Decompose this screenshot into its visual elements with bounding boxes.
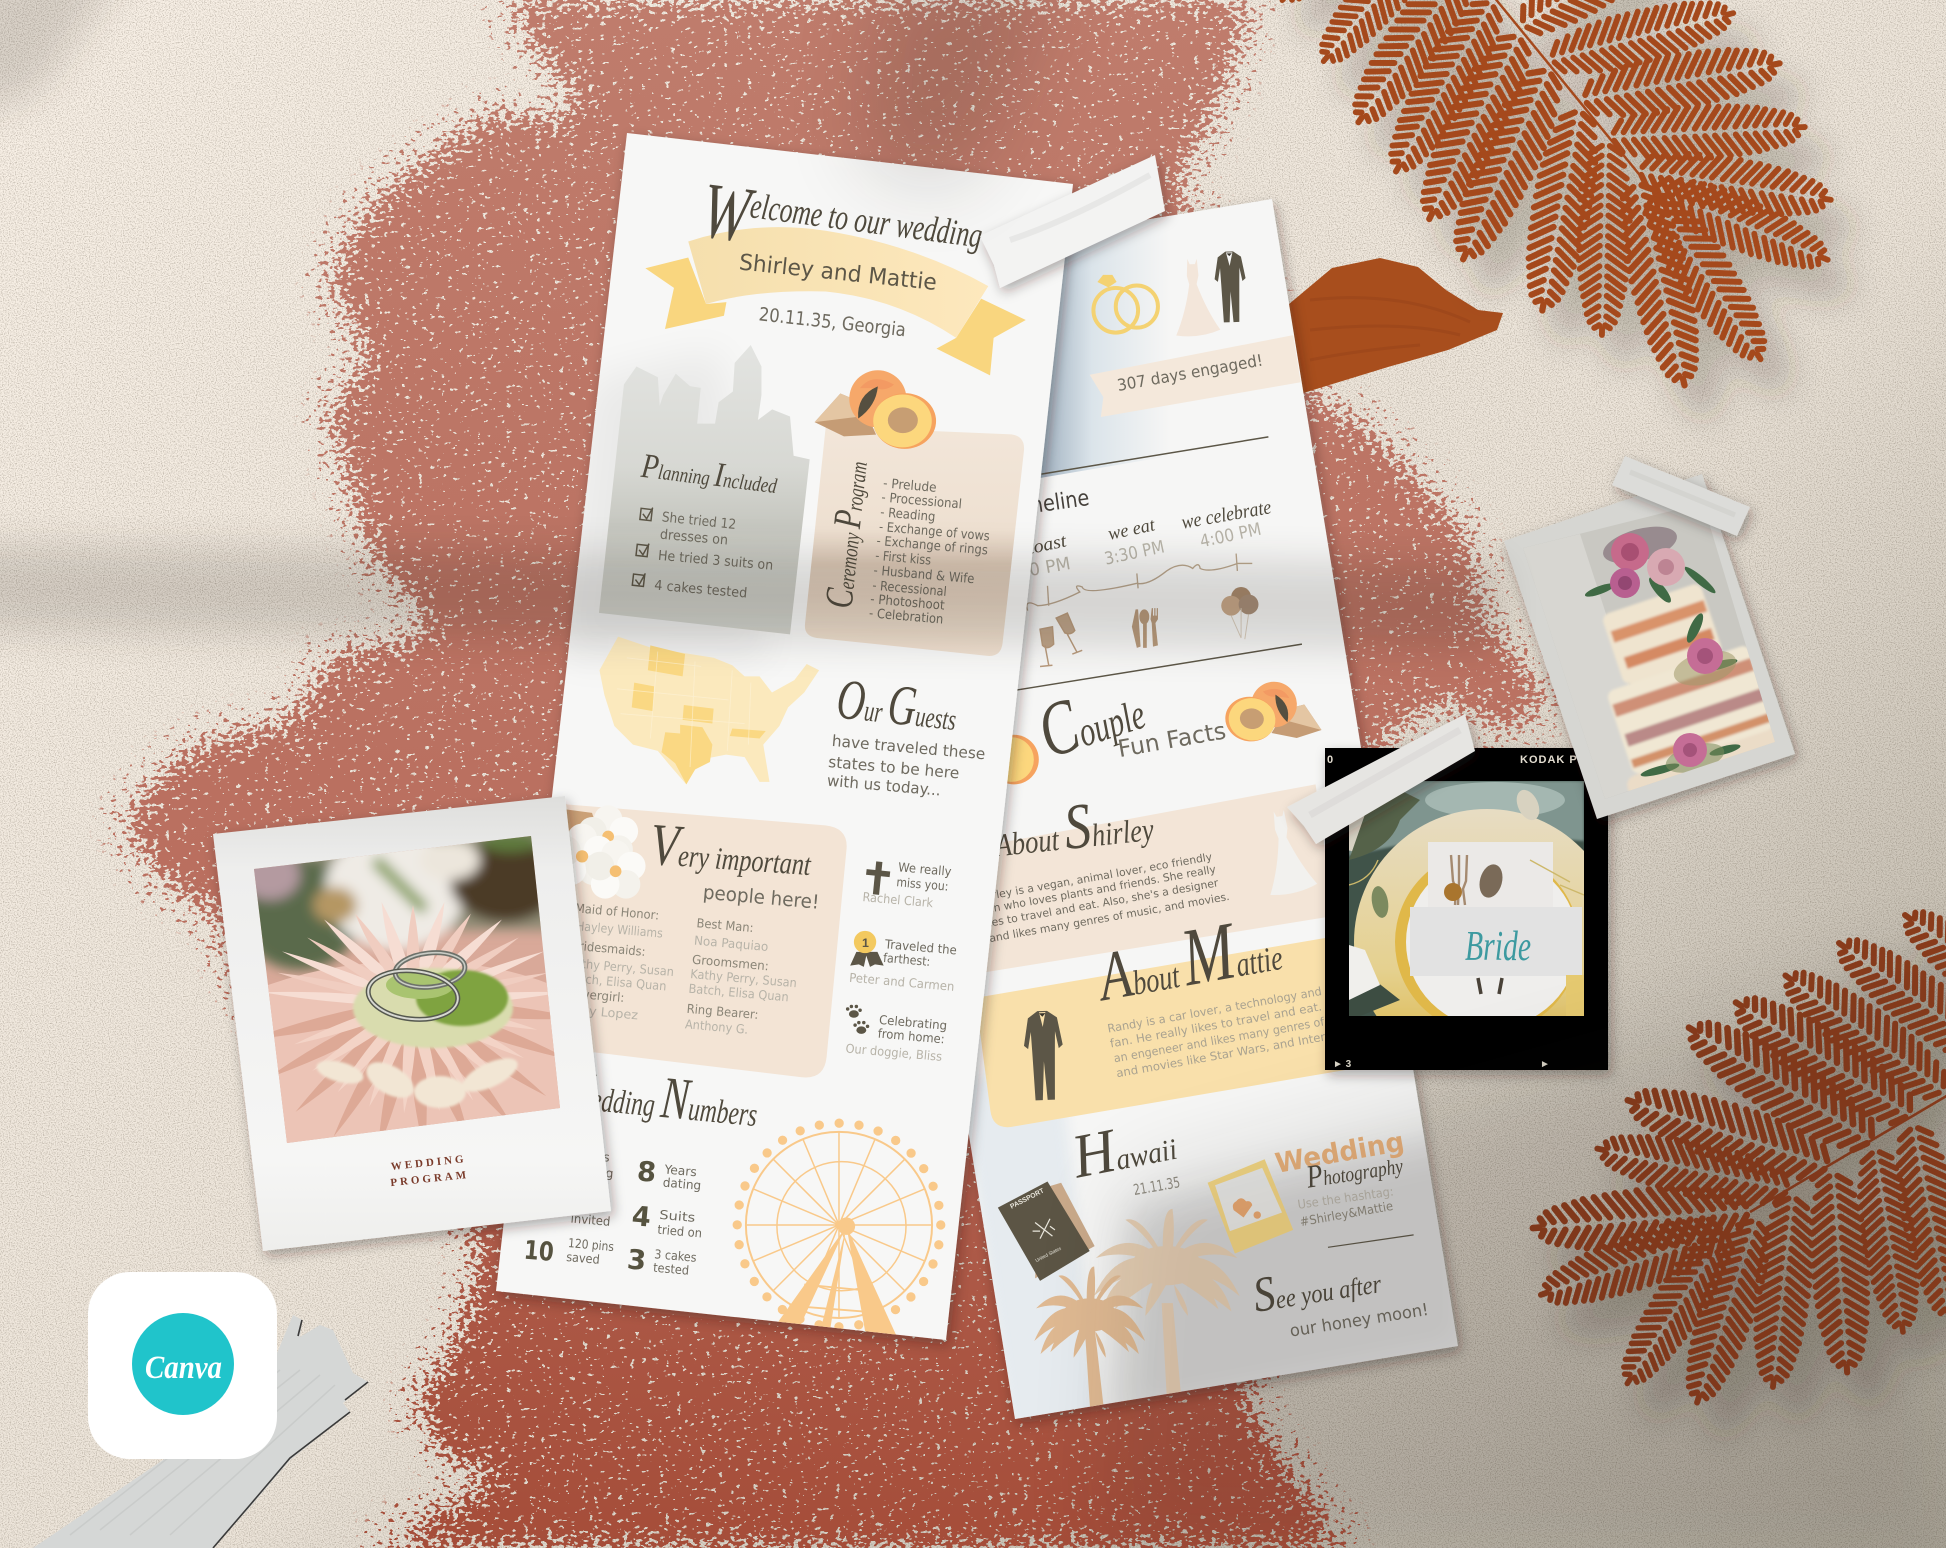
photo card: film frame with place setting: 0 xyxy=(1327,754,1333,766)
panel: ceremony program: - Exchange of rings xyxy=(876,534,989,559)
icon: cross with memorial note: We really xyxy=(898,859,952,879)
panel: ceremony program: - Processional xyxy=(881,490,963,512)
panel: very important people: Ring Bearer: xyxy=(686,1001,759,1022)
panel: very important people: Batch, Elisa Quan xyxy=(688,981,789,1004)
heading: wedding photography: Wedding xyxy=(1273,1127,1407,1180)
icon: tuxedo xyxy=(1023,1010,1065,1101)
panel: very important people: Best Man: xyxy=(696,915,754,935)
divider line xyxy=(1016,644,1302,690)
divider line xyxy=(1328,1235,1414,1247)
text: wedding program: WEDDING xyxy=(390,1153,467,1173)
heading: hawaii: 21.11.35 xyxy=(1132,1173,1182,1199)
heading: timeline: Timeline xyxy=(1005,485,1091,522)
icon: passport: PASSPORT xyxy=(1009,1187,1046,1211)
panel: ceremony program: - Photoshoot xyxy=(870,592,945,614)
panel: very important people: people here! xyxy=(702,881,820,914)
photo: naked cake with roses xyxy=(1500,490,1805,836)
icon: cross with memorial note: Rachel Clark xyxy=(862,889,934,910)
banner: days engaged: 307 days engaged! xyxy=(1116,351,1264,395)
icon: champagne glasses xyxy=(1040,613,1082,666)
tape: film frame xyxy=(1287,714,1475,844)
chart: USA guest map xyxy=(599,637,819,784)
heading: wedding photography: Photography xyxy=(1303,1144,1405,1195)
panel: very important people: Maid of Honor: xyxy=(574,900,660,923)
tape: top of left paper xyxy=(980,155,1165,288)
timeline labels: 3:00 PM xyxy=(1000,554,1072,586)
panel: planning included with skyline: She tried 12 xyxy=(661,509,737,533)
heading: couple fun facts: Fun Facts xyxy=(1116,716,1228,763)
icon: medal with farthest traveler note: farthest: xyxy=(883,950,931,969)
fern leaf: top right xyxy=(1264,0,1837,392)
panel: right paper (timeline and couple facts) xyxy=(968,198,1466,1429)
timeline labels: we eat xyxy=(1106,514,1158,545)
heading: about shirley: About Shirley xyxy=(989,782,1157,870)
icon: flowers xyxy=(551,805,646,899)
icon: peach pair xyxy=(815,370,936,449)
logo: canva app icon: Canva xyxy=(145,1350,222,1386)
panel: ceremony program xyxy=(805,426,1024,656)
panel: very important people: Kathy Perry, Susan xyxy=(690,966,797,990)
icon: passport xyxy=(998,1182,1095,1281)
panel: ceremony program: - Exchange of vows xyxy=(878,520,991,545)
photo: place setting with bride card: Bride xyxy=(1465,924,1531,970)
panel: ceremony program: Ceremony Program xyxy=(817,459,876,610)
panel: planning included with skyline: Planning Included xyxy=(639,446,780,501)
fern leaf: bottom right xyxy=(1530,894,1946,1410)
logo: canva app icon xyxy=(88,1272,277,1459)
stats: wedding numbers: invited xyxy=(570,1211,611,1229)
stats: wedding numbers: planning xyxy=(559,1161,614,1181)
panel: very important people: Hayley Williams xyxy=(576,918,663,941)
panel: ceremony program: - Husband & Wife xyxy=(873,563,975,587)
panel: ceremony program: - First kiss xyxy=(875,549,932,569)
photo card: wedding rings on flower xyxy=(213,796,611,1251)
icon: cutlery xyxy=(1132,608,1158,648)
panel: ceremony program: - Reading xyxy=(880,505,936,525)
panel: planning included with skyline xyxy=(599,345,810,634)
text: about mattie: and movies like Star Wars, and Interstellar xyxy=(1115,1023,1362,1080)
text: about shirley: likes to travel and eat. Also, she's a designer xyxy=(979,876,1220,931)
divider line xyxy=(1041,437,1268,474)
photo card: film frame with place setting xyxy=(1325,748,1620,1075)
heading: couple fun facts: Couple xyxy=(1027,660,1153,774)
panel: planning included with skyline: dresses on xyxy=(659,527,729,549)
heading: hawaii: Hawaii xyxy=(1066,1105,1181,1192)
heading: welcome to our wedding: W xyxy=(697,166,760,260)
icon: peach pair xyxy=(1222,675,1327,751)
text: our guests: Our Guests xyxy=(834,668,960,743)
photo card: film frame with place setting: ► 3 xyxy=(1333,1059,1352,1070)
stats: wedding numbers: Months xyxy=(564,1146,610,1165)
panel: ceremony program: - Celebration xyxy=(868,606,944,628)
silver paint smear xyxy=(33,1315,368,1548)
heading: wedding numbers: Wedding Numbers xyxy=(557,1054,761,1139)
panel: very important people xyxy=(534,802,847,1078)
icon: balloons xyxy=(1221,587,1258,639)
orange paint smear xyxy=(1270,258,1503,400)
panel: very important people: Batch, Elisa Quan xyxy=(566,970,667,993)
photo: place setting with bride card xyxy=(1330,781,1620,1075)
icon: paw prints with pet note xyxy=(845,1005,948,1064)
photo card: film frame with place setting: KODAK P xyxy=(1520,754,1578,766)
panel: very important people: Jenny Lopez xyxy=(560,1001,639,1022)
text: about shirley xyxy=(961,850,1230,945)
icon: cross with memorial note xyxy=(862,859,952,910)
text: see you after honey moon: our honey moon! xyxy=(1288,1299,1430,1341)
panel: planning included with skyline: 4 cakes tested xyxy=(654,578,748,602)
photo: rings on flower xyxy=(240,820,582,1160)
icon: medal with farthest traveler note: 1 xyxy=(862,936,869,950)
text: see you after honey moon xyxy=(1249,1248,1430,1341)
stats: wedding numbers: 3 cakes xyxy=(654,1246,697,1265)
timeline curve xyxy=(1027,554,1252,611)
panel: planning included with skyline: He tried 3 suits on xyxy=(657,548,774,574)
text: our guests: with us today... xyxy=(826,772,942,800)
text: our guests: states to be here xyxy=(827,753,960,782)
stats: wedding numbers: 10 xyxy=(523,1236,555,1268)
illustration: ferris wheel xyxy=(737,1123,941,1340)
illustration: palm trees xyxy=(1034,1209,1240,1440)
panel: ceremony program: - Prelude xyxy=(883,476,937,496)
timeline labels: 3:30 PM xyxy=(1103,537,1166,570)
icon: medal with farthest traveler note: Peter and Carmen xyxy=(849,970,955,994)
timeline labels: we toast xyxy=(999,530,1069,565)
stats: wedding numbers: 4 xyxy=(630,1201,652,1234)
stats: wedding numbers: tried on xyxy=(657,1222,703,1241)
text: our guests: have traveled these xyxy=(831,732,986,763)
heading: about mattie: About Mattie xyxy=(1088,897,1287,1019)
stats: wedding numbers xyxy=(523,1146,703,1278)
text: about shirley: woman who loves plants and friends. She really xyxy=(961,863,1217,920)
stats: wedding numbers: saved xyxy=(566,1249,600,1267)
panel: left paper (welcome, planning, guests, numbers) xyxy=(496,133,1073,1340)
icon: wedding rings xyxy=(1093,276,1158,333)
banner: ribbon names: 20.11.35, Georgia xyxy=(758,304,907,341)
terracotta paint brush stroke xyxy=(89,0,1562,1548)
panel: about mattie xyxy=(976,933,1375,1127)
timeline labels: we celebrate xyxy=(1180,496,1273,534)
timeline labels: 4:00 PM xyxy=(1198,520,1263,552)
banner: ribbon names: Shirley and Mattie xyxy=(738,249,938,296)
stats: wedding numbers: Suits xyxy=(659,1207,696,1225)
icon: polaroid with hearts xyxy=(1208,1159,1293,1254)
icon: paw prints with pet note: from home: xyxy=(877,1026,945,1046)
panel: very important people: Noa Paquiao xyxy=(694,933,769,954)
banner: days engaged xyxy=(1090,335,1301,417)
icon: wedding dress xyxy=(1174,258,1221,337)
panel: very important people: Bridesmaids: xyxy=(571,937,646,959)
panel: very important people: Kathy Perry, Susan xyxy=(567,955,675,979)
text: our guests xyxy=(826,668,986,800)
heading: couple fun facts xyxy=(1027,660,1228,774)
stats: wedding numbers: Years xyxy=(663,1161,697,1179)
heading: welcome to our wedding: elcome to our wedding xyxy=(748,185,985,256)
text: hashtag xyxy=(1297,1183,1394,1229)
text: hashtag: Use the hashtag: xyxy=(1297,1183,1394,1212)
icon: half peach behind paper xyxy=(989,735,1039,784)
text: about shirley: and likes many genres of music, and movies. xyxy=(988,890,1230,945)
text: about mattie: an engeneer and likes many genres of xyxy=(1113,1014,1326,1065)
text: wedding program: PROGRAM xyxy=(390,1169,470,1189)
icon: paw prints with pet note: Celebrating xyxy=(878,1012,948,1033)
icon: paw prints with pet note: Our doggie, Bliss xyxy=(845,1040,943,1064)
icon: tuxedo xyxy=(1214,251,1247,323)
photo card: film frame with place setting: ► xyxy=(1540,1059,1550,1070)
text: about mattie: fan. He really likes to travel and eat. Also xyxy=(1109,994,1351,1050)
icon: passport: United States xyxy=(1035,1246,1063,1263)
panel: very important people: Flowergirl: xyxy=(562,985,625,1005)
icon: white dress xyxy=(1259,807,1318,896)
tape: cake photo xyxy=(1612,456,1750,536)
icon: cross with memorial note: miss you: xyxy=(896,874,949,894)
panel: about shirley xyxy=(980,784,1334,973)
panel: very important people: Groomsmen: xyxy=(692,952,769,973)
photo card: wedding cake xyxy=(1500,474,1805,836)
icon: medal with farthest traveler note xyxy=(849,931,957,994)
text: wedding program xyxy=(390,1153,470,1189)
stats: wedding numbers: 3 xyxy=(626,1244,647,1277)
text: about mattie xyxy=(1106,984,1362,1080)
banner: ribbon names xyxy=(645,227,1026,375)
text: see you after honey moon: See you after xyxy=(1249,1248,1385,1323)
panel: ceremony program: - Recessional xyxy=(872,579,947,600)
text: hashtag: #Shirley&Mattie xyxy=(1299,1198,1394,1229)
text: about mattie: Randy is a car lover, a technology and xyxy=(1106,984,1323,1036)
icon: medal with farthest traveler note: Traveled the xyxy=(883,936,957,957)
stats: wedding numbers: 8 xyxy=(636,1156,657,1189)
panel: very important people: Very important xyxy=(648,811,815,888)
timeline labels xyxy=(1030,504,1271,576)
stats: wedding numbers: 120 pins xyxy=(568,1235,615,1254)
stats: wedding numbers: dating xyxy=(662,1175,702,1193)
panel: very important people: Anthony G. xyxy=(684,1016,749,1037)
text: about shirley: Shirley is a vegan, animal lover, eco friendly xyxy=(974,850,1214,905)
stats: wedding numbers: tested xyxy=(653,1260,690,1278)
